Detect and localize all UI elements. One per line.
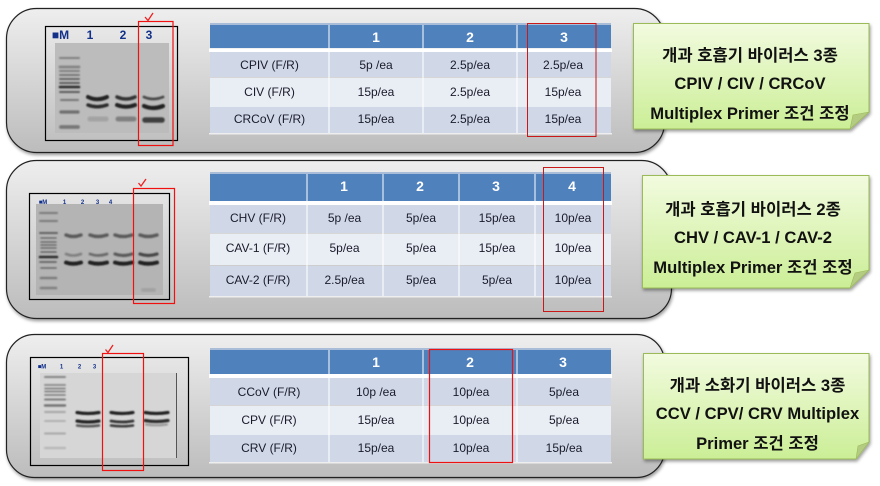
table values: 5p/ea <box>549 413 579 427</box>
gel figure 3 <box>30 345 188 470</box>
lane labels: 3 <box>93 364 97 370</box>
header labels: 3 <box>560 29 568 45</box>
table rows <box>209 348 612 464</box>
lane labels: 3 <box>146 28 153 42</box>
table values: 10p/ea <box>453 441 490 455</box>
gel figure 1 <box>46 13 178 146</box>
note text <box>653 200 853 277</box>
note body <box>644 354 869 459</box>
table rows <box>209 172 612 298</box>
table values: 5p/ea <box>329 241 360 255</box>
lane labels: 1 <box>87 28 94 42</box>
table values: CIV (F/R) <box>244 85 295 99</box>
check mark <box>138 179 146 186</box>
gel bands <box>60 58 163 127</box>
table values: 5p/ea <box>549 385 579 399</box>
table values: 15p/ea <box>358 441 395 455</box>
table values: 2.5p/ea <box>543 58 583 72</box>
panel: respiratory virus 3 types <box>6 8 869 152</box>
table highlight column <box>544 168 604 312</box>
table values: 15p/ea <box>358 85 395 99</box>
lane labels <box>52 28 153 42</box>
table 1 <box>209 23 612 136</box>
lane labels: 2 <box>78 364 82 370</box>
note text: 개과 호흡기 바이러스 3종 <box>662 46 838 65</box>
note body <box>642 176 869 288</box>
gel image <box>36 204 163 295</box>
table header <box>210 348 611 374</box>
table values: 5p/ea <box>406 273 436 287</box>
table values: 10p/ea <box>555 211 592 225</box>
note 1 <box>634 24 869 129</box>
red highlight lane <box>102 354 144 470</box>
table values: 15p/ea <box>479 241 516 255</box>
table values: 5p/ea <box>406 241 436 255</box>
lane labels: ■M <box>39 200 47 206</box>
table values: 5p /ea <box>328 211 362 225</box>
lane labels: 3 <box>96 200 100 206</box>
red highlight lane <box>134 188 174 304</box>
header labels <box>372 29 568 45</box>
table values: 10p /ea <box>356 385 396 399</box>
folded corner <box>856 442 869 459</box>
lane labels: 2 <box>120 28 127 42</box>
header labels: 2 <box>416 178 424 194</box>
table values <box>234 58 583 126</box>
table values: CAV-2 (F/R) <box>226 273 290 287</box>
note text <box>656 376 860 453</box>
panel background <box>6 334 664 478</box>
table values: CAV-1 (F/R) <box>226 241 290 255</box>
check mark <box>145 13 153 20</box>
header labels: 3 <box>559 354 567 370</box>
panel: respiratory virus 2 types <box>6 160 869 318</box>
table values: CRV (F/R) <box>241 441 297 455</box>
lane labels: ■M <box>38 364 46 370</box>
table highlight column <box>528 24 596 136</box>
note 3 <box>644 354 869 459</box>
header labels: 2 <box>466 354 474 370</box>
lane labels <box>39 200 113 206</box>
note text: CPIV / CIV / CRCoV <box>674 74 826 93</box>
lane labels: 1 <box>63 200 67 206</box>
header labels <box>372 354 567 370</box>
table values: 10p/ea <box>555 273 592 287</box>
header labels: 1 <box>372 29 380 45</box>
lane labels <box>38 364 97 370</box>
lane labels: ■M <box>52 28 69 42</box>
header labels <box>340 178 576 194</box>
panel: digestive virus 3 types <box>6 334 869 478</box>
table values: 5p/ea <box>406 211 436 225</box>
table values: 10p/ea <box>453 413 490 427</box>
lane labels: 1 <box>60 364 64 370</box>
table 2 <box>209 168 612 312</box>
table values <box>226 211 592 287</box>
table values: 2.5p/ea <box>450 85 490 99</box>
table header <box>210 23 611 48</box>
note body <box>634 24 869 129</box>
note text: CCV / CPV/ CRV Multiplex <box>656 404 860 423</box>
note text: 개과 소화기 바이러스 3종 <box>670 376 845 395</box>
header labels: 2 <box>466 29 474 45</box>
table values: CRCoV (F/R) <box>234 112 305 126</box>
gel image <box>55 43 169 133</box>
header labels: 3 <box>492 178 500 194</box>
note text: Primer 조건 조정 <box>696 434 819 453</box>
folded corner <box>850 112 869 129</box>
panel background <box>6 8 664 152</box>
note 2 <box>642 176 869 288</box>
gel bands <box>45 377 168 448</box>
gel image <box>40 373 177 458</box>
table values: 2.5p/ea <box>324 273 365 287</box>
table 3 <box>209 348 612 464</box>
table values: 15p/ea <box>358 413 395 427</box>
table values: 5p/ea <box>482 273 512 287</box>
table values: 5p /ea <box>359 58 393 72</box>
table values: 15p/ea <box>479 211 516 225</box>
note text <box>650 46 850 123</box>
table values: 10p/ea <box>453 385 490 399</box>
table values: CPIV (F/R) <box>240 58 299 72</box>
gel frame <box>30 358 188 466</box>
note text: 개과 호흡기 바이러스 2종 <box>665 200 841 219</box>
gel frame <box>30 194 170 300</box>
table header <box>210 172 611 201</box>
table values <box>238 385 583 455</box>
table values: 15p/ea <box>545 112 582 126</box>
header labels: 4 <box>568 178 576 194</box>
table values: 2.5p/ea <box>450 58 490 72</box>
lane labels: 2 <box>81 200 85 206</box>
table values: CPV (F/R) <box>241 413 297 427</box>
table values: 2.5p/ea <box>450 112 490 126</box>
table values: CHV (F/R) <box>230 211 286 225</box>
gel figure 2 <box>30 179 174 304</box>
folded corner <box>850 270 869 288</box>
table values: 15p/ea <box>545 85 582 99</box>
table values: 15p/ea <box>546 441 583 455</box>
gel frame <box>46 26 178 140</box>
table highlight column <box>430 350 512 462</box>
header labels: 1 <box>340 178 348 194</box>
table rows <box>209 23 612 134</box>
red highlight lane <box>138 22 173 146</box>
header labels: 1 <box>372 354 380 370</box>
panel background <box>6 160 672 318</box>
lane labels: 4 <box>109 200 113 206</box>
gel bands <box>40 213 157 290</box>
table values: CCoV (F/R) <box>238 385 300 399</box>
note text: Multiplex Primer 조건 조정 <box>650 104 850 123</box>
table values: 10p/ea <box>555 241 592 255</box>
gel right edge <box>176 373 177 458</box>
table values: 15p/ea <box>358 112 395 126</box>
check mark <box>106 345 113 352</box>
note text: CHV / CAV-1 / CAV-2 <box>674 228 832 247</box>
note text: Multiplex Primer 조건 조정 <box>653 258 853 277</box>
